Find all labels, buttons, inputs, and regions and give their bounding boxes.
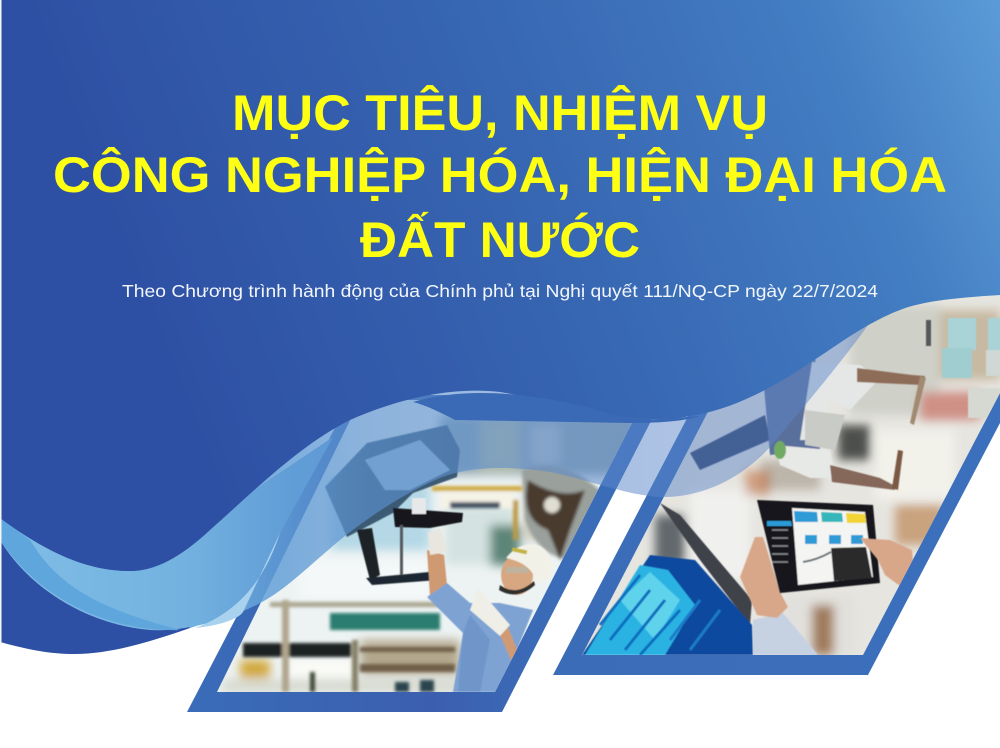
left edge line [0,0,2,645]
title [53,85,947,268]
panel: left factory photo [217,400,632,692]
tablet [757,500,880,593]
translucent wave band [0,322,870,630]
worker [427,528,552,692]
right hand [860,538,914,586]
black machine bar [243,643,351,657]
dark lower wave [0,500,190,654]
data art [582,503,753,655]
yellow beam [432,486,522,491]
panel: right slanted photo frame [553,290,1000,675]
panel: left slanted photo frame [187,395,660,712]
panel: right technology photo [570,290,1000,660]
green bar [330,613,440,630]
pale wave highlight [195,533,280,628]
title: ĐẤT NƯỚC [360,212,640,268]
sleeve and left hand [740,537,818,655]
main blue header shape [0,0,1000,571]
title: MỤC TIÊU, NHIỆM VỤ [232,85,768,141]
welding robot arm [690,352,926,490]
darker light-blue wave edge [0,518,180,630]
overlap band above left photo [413,393,700,423]
subtitle: Theo Chương trình hành động của Chính phủ tại Nghị quyết 111/NQ-CP ngày 22/7/2024 [122,281,878,301]
robot arm [325,425,463,585]
title: CÔNG NGHIỆP HÓA, HIỆN ĐẠI HÓA [53,146,947,203]
solid wave backing left of frame [150,437,333,628]
teal machines [926,318,1000,418]
fan [522,466,600,560]
